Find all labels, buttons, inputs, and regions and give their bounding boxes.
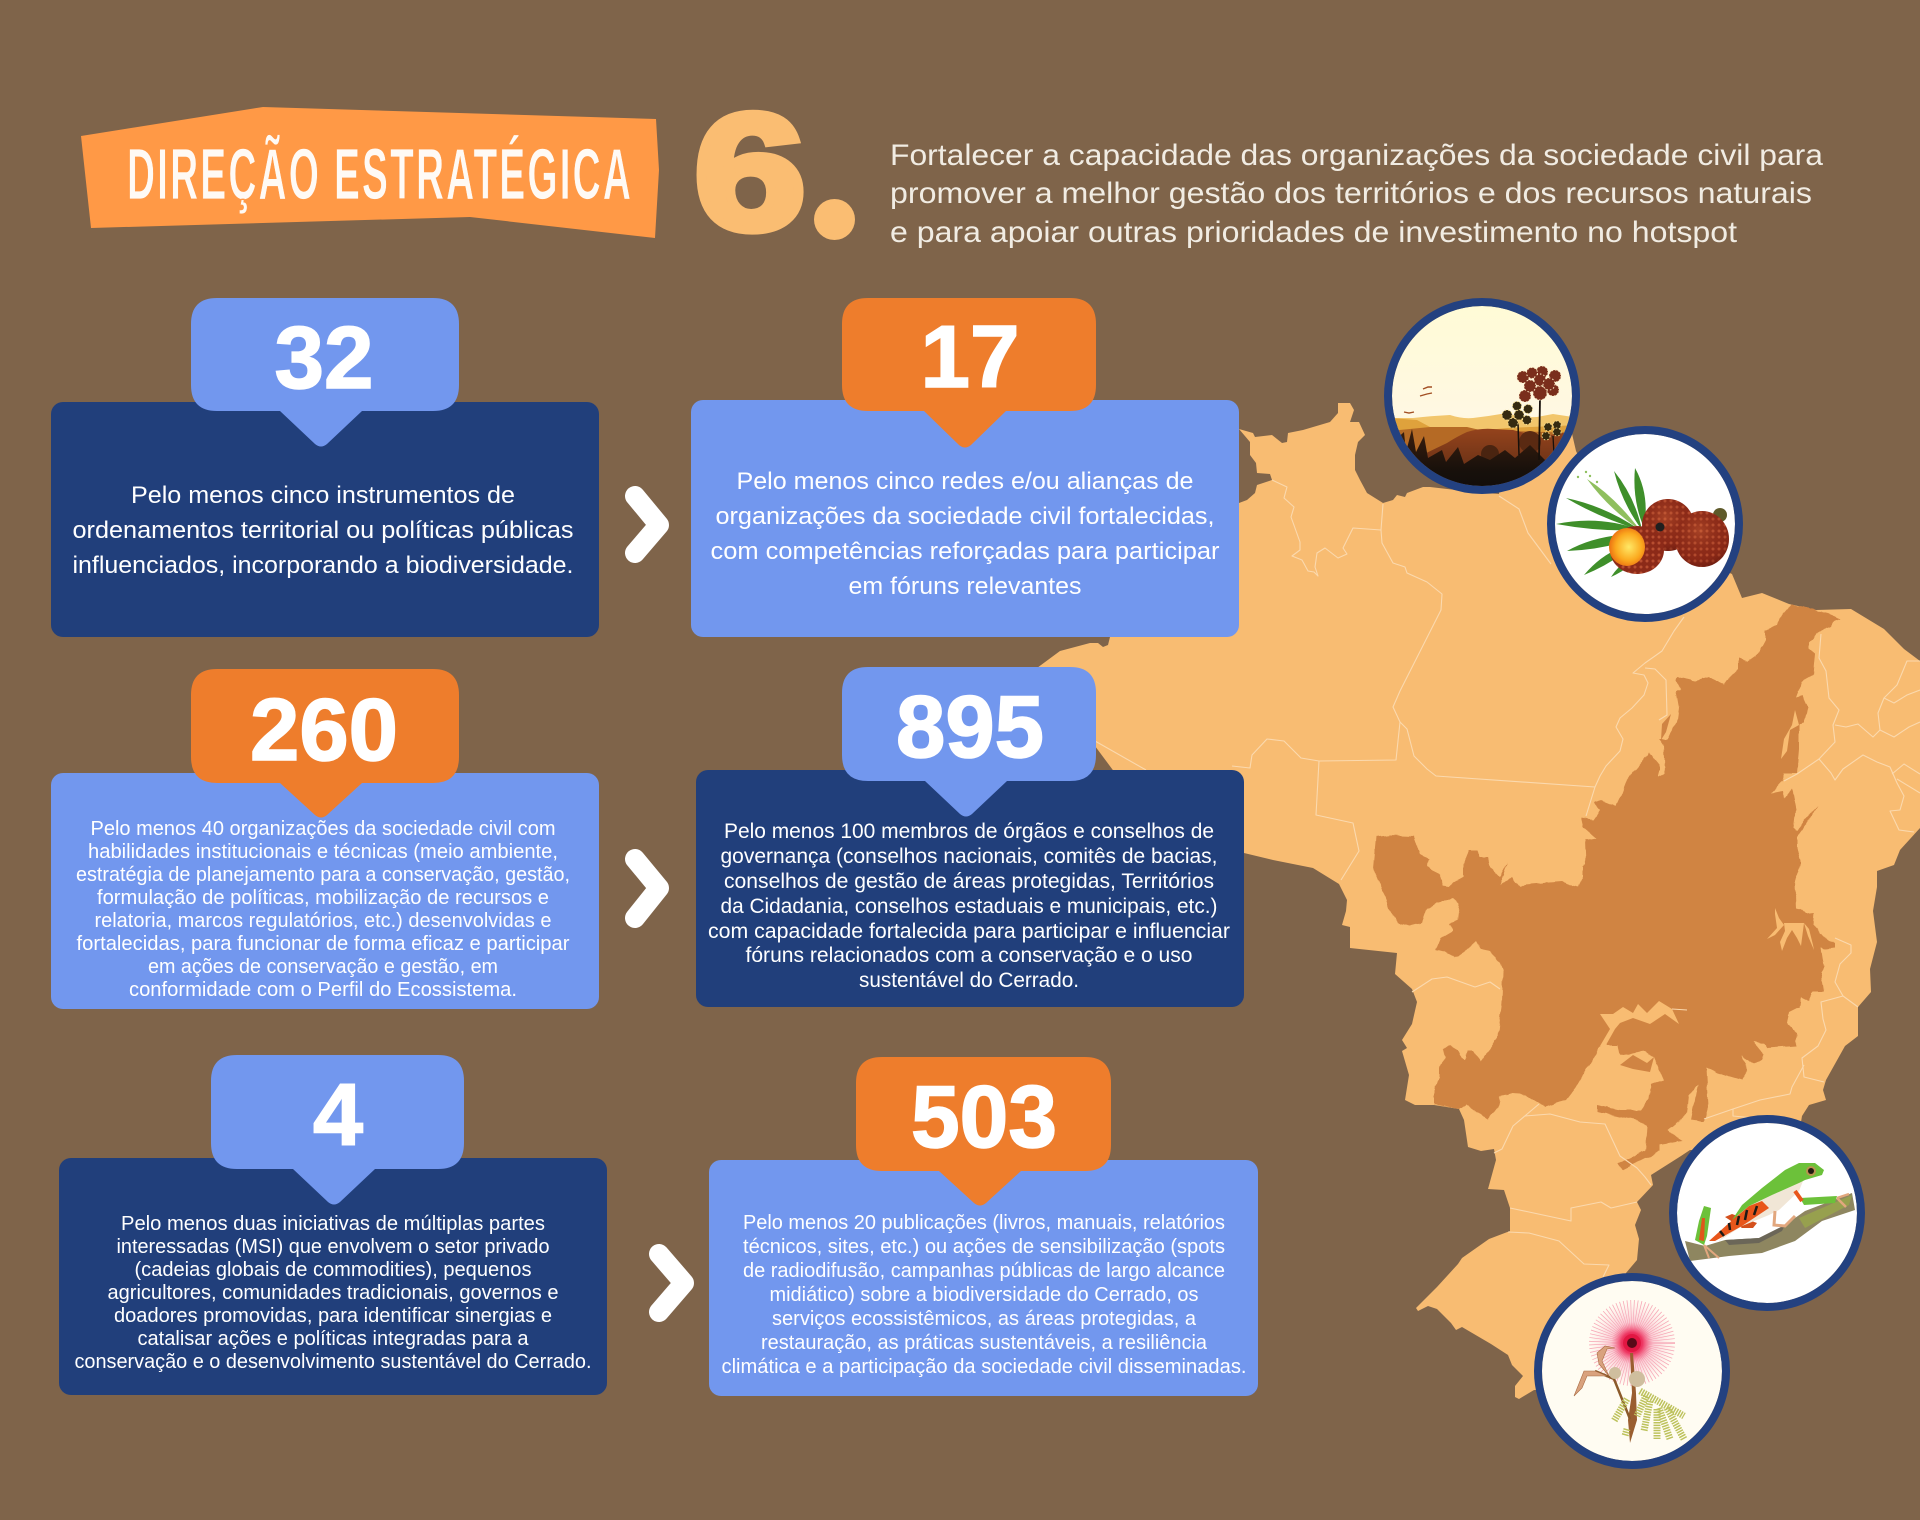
text block: estratégia de planejamento para a conservação, gestão, [76, 864, 570, 886]
number 4: 4 [313, 1065, 363, 1164]
belly [1719, 1176, 1805, 1241]
text block: conservação e o desenvolvimento sustentável do Cerrado. [74, 1351, 592, 1373]
text block: conselhos de gestão de áreas protegidas, Territórios [724, 870, 1214, 893]
text block: interessadas (MSI) que envolvem o setor privado [116, 1236, 550, 1258]
panel: 17 networks [691, 298, 1239, 637]
text block: climática e a participação da sociedade civil disseminadas. [722, 1356, 1246, 1378]
arrow 3 [659, 1254, 684, 1312]
text block: influenciados, incorporando a biodiversidade. [72, 552, 574, 579]
text block [74, 1213, 592, 1373]
text block: habilidades institucionais e técnicas (meio ambiente, [88, 841, 558, 863]
badge 503 [856, 1057, 1111, 1206]
fruits [1642, 499, 1694, 551]
text block: (cadeias globais de commodities), pequenos [134, 1259, 532, 1281]
text block [710, 468, 1220, 600]
text block: midiático) sobre a biodiversidade do Cerrado, os [770, 1284, 1198, 1306]
text block: com competências reforçadas para participar [710, 538, 1220, 565]
rear leg [1695, 1206, 1711, 1245]
big number 6 [694, 80, 855, 265]
text block: Pelo menos 100 membros de órgãos e conselhos de [724, 820, 1214, 843]
text block: Pelo menos 40 organizações da sociedade civil com [90, 818, 556, 840]
back [1732, 1163, 1824, 1220]
text block: fóruns relacionados com a conservação e o uso [746, 944, 1192, 967]
text block: Pelo menos cinco redes e/ou alianças de [736, 468, 1194, 495]
icon: calliandra flower circle [1538, 1277, 1726, 1465]
text block [708, 820, 1230, 992]
text block: restauração, as práticas sustentáveis, a resiliência [761, 1332, 1208, 1354]
badge 17 [842, 298, 1096, 448]
arrow 2 [635, 859, 659, 918]
badge 260 [191, 669, 459, 818]
text block [72, 482, 574, 579]
text block [76, 818, 570, 1001]
banner shape [81, 107, 659, 238]
text block: fortalecidas, para funcionar de forma eficaz e participar [76, 933, 570, 955]
text block: serviços ecossistêmicos, as áreas protegidas, a [772, 1308, 1197, 1330]
tall flower cluster [1517, 366, 1561, 402]
branch [1685, 1193, 1855, 1261]
text block: Pelo menos 20 publicações (livros, manuais, relatórios [743, 1212, 1225, 1234]
heading text [890, 139, 1823, 249]
text block: doadores promovidas, para identificar sinergias e [114, 1305, 552, 1327]
text block: conformidade com o Perfil do Ecossistema. [129, 979, 517, 1001]
panel: 503 publications [709, 1057, 1258, 1396]
text block: sustentável do Cerrado. [859, 969, 1079, 992]
text block: Pelo menos cinco instrumentos de [131, 482, 515, 509]
heading text: Fortalecer a capacidade das organizações da sociedade civil para [890, 139, 1823, 172]
text block: relatoria, marcos regulatórios, etc.) desenvolvidas e [94, 910, 552, 932]
icon: tree frog circle [1673, 1119, 1861, 1307]
badge 4 [211, 1055, 464, 1204]
state borders [1095, 480, 1920, 1277]
icon: savanna landscape circle [1388, 302, 1580, 500]
big number 6: . [828, 197, 839, 241]
text block [722, 1212, 1246, 1378]
text block: formulação de políticas, mobilização de recursos e [97, 887, 549, 909]
small flower clusters [1502, 402, 1561, 440]
palm leaves [1556, 468, 1646, 577]
text block: em fóruns relevantes [848, 573, 1082, 600]
big number 6: 6 [694, 80, 806, 265]
text block: técnicos, sites, etc.) ou ações de sensibilização (spots [743, 1236, 1225, 1258]
text block: da Cidadania, conselhos estaduais e municipais, etc.) [720, 895, 1218, 918]
panel: 895 members [696, 667, 1244, 1007]
heading text: promover a melhor gestão dos territórios e dos recursos naturais [890, 177, 1812, 210]
icon: buriti fruit circle [1551, 430, 1739, 618]
banner title: DIREÇÃO ESTRATÉGICA [127, 134, 633, 215]
text block: Pelo menos duas iniciativas de múltiplas partes [121, 1213, 545, 1235]
arrow 1 [635, 496, 659, 553]
Cerrado region [1373, 604, 1841, 1170]
panel: 260 organizations [51, 669, 599, 1009]
number 895: 895 [896, 677, 1044, 776]
text block: agricultores, comunidades tradicionais, governos e [108, 1282, 558, 1304]
Cerrado inner gaps [1600, 710, 1814, 1072]
number 503: 503 [911, 1067, 1057, 1166]
text block: governança (conselhos nacionais, comitês de bacias, [720, 845, 1218, 868]
badge 32 [191, 298, 459, 446]
map: Brazil with Cerrado biome [1037, 403, 1920, 1399]
text block: de radiodifusão, campanhas públicas de largo alcance [743, 1260, 1225, 1282]
map outline [1037, 403, 1920, 1399]
front legs [1800, 1196, 1837, 1205]
text block: com capacidade fortalecida para participar e influenciar [708, 920, 1230, 943]
panel: 32 instruments [51, 298, 599, 637]
text block: organizações da sociedade civil fortalecidas, [716, 503, 1214, 530]
panel: 4 initiatives [59, 1055, 607, 1395]
text block: ordenamentos territorial ou políticas públicas [72, 517, 574, 544]
heading text: e para apoiar outras prioridades de investimento no hotspot [890, 216, 1738, 249]
number 260: 260 [250, 680, 398, 779]
badge 895 [842, 667, 1096, 816]
text block: em ações de conservação e gestão, em [148, 956, 498, 978]
title banner [81, 107, 659, 238]
number 32: 32 [274, 308, 374, 407]
number 17: 17 [920, 307, 1020, 406]
text block: catalisar ações e políticas integradas para a [138, 1328, 529, 1350]
